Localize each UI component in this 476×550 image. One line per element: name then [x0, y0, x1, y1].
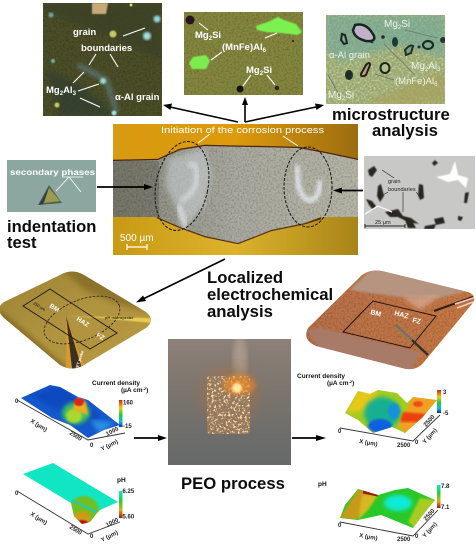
colour bar	[437, 485, 440, 508]
label: BM: BM	[370, 309, 382, 319]
chart: pH before PEO: 0	[90, 534, 94, 540]
heading: indentation test: indentation	[7, 217, 96, 236]
label: Mg2Si top: Mg	[384, 19, 398, 30]
chart: current density before PEO: 160	[123, 400, 134, 406]
glowing coupon	[207, 376, 250, 434]
title: pH	[318, 481, 327, 488]
scale bar: 500 um: 500 µm	[120, 233, 154, 244]
label: Mg2Al3: Al	[63, 85, 73, 96]
heading: microstructure analysis: analysis	[372, 121, 438, 140]
label: grain boundaries: boundaries	[388, 187, 416, 193]
label: Mg2Al3: 2	[60, 91, 64, 97]
label: Mg2Si upper: Si	[212, 30, 221, 41]
diamond photo: copper specimen after PEO	[306, 270, 474, 370]
colour bar	[437, 390, 441, 413]
chart: current density before PEO: )	[146, 387, 148, 394]
surface	[340, 385, 440, 437]
title: Current density	[92, 380, 140, 387]
chart: current density after PEO: 0	[338, 429, 342, 435]
label: grain boundaries: grain	[388, 179, 400, 185]
chart: pH after PEO: 2500	[397, 537, 411, 543]
label: MnFe Al6: (MnFe)Al	[222, 42, 263, 53]
chart: current density after PEO: )	[352, 380, 354, 387]
label: Mg2Al3: Mg	[46, 85, 60, 96]
leader lines	[199, 23, 277, 86]
chart: current density before PEO: 2500	[68, 431, 83, 443]
chart: current density after PEO: -2	[349, 379, 353, 384]
label: boundaries: boundaries	[81, 43, 132, 54]
title: Current density	[297, 373, 345, 380]
map frame	[23, 289, 117, 349]
heading: localized electrochemical analysis: electrochemical	[207, 285, 333, 304]
phase: green inclusion small	[189, 55, 210, 69]
arrow: to grain boundaries photo	[163, 104, 238, 122]
label: Mg2Si lower: 2	[260, 71, 264, 77]
diamond photo: gold specimen with SVET probe	[0, 272, 151, 368]
chart: current density before PEO: 1000	[105, 426, 120, 438]
label: Mg2Al3: Al	[428, 61, 437, 72]
heading: microstructure analysis: microstructure	[332, 105, 450, 124]
icon: pyramid indent	[38, 185, 62, 205]
chart: pH before PEO	[15, 460, 135, 544]
label: FZ: FZ	[412, 317, 422, 326]
label: Mg2Si lower: Mg	[246, 65, 260, 76]
chart: current density after PEO: (µA cm	[327, 380, 349, 387]
chart: pH before PEO: 0	[15, 491, 19, 497]
label: BM: BM	[48, 303, 60, 314]
label: Mg2Si bottom: Si	[345, 90, 354, 101]
chart: current density before PEO: -2	[143, 386, 147, 391]
arrow: to localized analysis	[136, 259, 225, 302]
label: pH microprobe: pH microprobe	[105, 315, 134, 320]
surface	[20, 460, 120, 526]
ellipse: right weld zone	[284, 147, 332, 227]
label: HAZ: HAZ	[75, 316, 90, 329]
label: Mg2Si bottom: 2	[342, 96, 346, 102]
chart: current density before PEO: Y (µm)	[100, 439, 119, 453]
phase: green inclusion large	[256, 17, 302, 35]
chart: current density after PEO: 3	[443, 390, 447, 396]
photo: Mg2Si and MnFe phases micrograph	[184, 12, 303, 95]
label: Mg2Al3: Mg	[411, 61, 425, 72]
label: MnFe Al6: 6	[434, 82, 438, 88]
arrow: to PEO photo	[134, 435, 167, 441]
chart: current density before PEO: 0	[90, 443, 94, 449]
label: Mg2Al3: 3	[437, 67, 441, 73]
label: MnFe Al6: (MnFe)Al	[395, 76, 434, 87]
chart: current density after PEO: 0	[415, 440, 419, 446]
label: Mg2Si upper: Mg	[195, 30, 209, 41]
arrow: to indentation	[97, 184, 153, 190]
label: Mg2Al3: 2	[425, 67, 429, 73]
chart: pH after PEO: 2500	[423, 508, 437, 522]
label: Mg2Si lower: Si	[263, 65, 272, 76]
heading: localized electrochemical analysis: analysis	[207, 302, 273, 321]
chart: current density after PEO: Y (µm)	[422, 428, 439, 445]
label: FZ: FZ	[95, 332, 105, 342]
heading: PEO process: PEO process	[181, 474, 285, 493]
chart: current density after PEO: -5	[443, 411, 449, 417]
chart: pH after PEO	[318, 481, 450, 543]
arrow: from PEO photo	[292, 435, 326, 441]
arrow: to phases photo	[242, 97, 248, 122]
scale bar: 500 um	[120, 233, 154, 250]
label: grain: grain	[73, 27, 96, 38]
colour bar	[119, 491, 122, 518]
chart: pH after PEO: 0	[338, 523, 342, 529]
chart: pH before PEO: 6.25	[122, 489, 135, 495]
chart: current density before PEO	[15, 380, 148, 453]
heading: microstructure analysis	[332, 105, 450, 140]
chart: pH before PEO: Y (µm)	[100, 530, 119, 544]
label: Mg2Si upper: 2	[209, 36, 213, 42]
chart: pH before PEO: 1000	[105, 517, 120, 529]
label: Mg2Si top: 2	[398, 25, 402, 31]
chart: pH after PEO: 7.8	[441, 484, 450, 490]
chart: current density after PEO: X (µm)	[359, 439, 378, 448]
chart: pH before PEO: 5.60	[122, 514, 135, 520]
chart: pH after PEO: 7.1	[441, 505, 450, 511]
photo: indentation test	[7, 160, 96, 212]
chart: current density before PEO: X (µm)	[29, 419, 48, 433]
label: HAZ: HAZ	[394, 310, 410, 321]
chart: pH before PEO: 2500	[68, 525, 83, 537]
chart: current density after PEO: 2500	[423, 414, 437, 428]
heading: localized electrochemical analysis	[207, 268, 333, 321]
map frame	[343, 301, 436, 348]
label: initiation of corrosion: Initiation of the corrosion process	[161, 125, 324, 136]
leader lines	[73, 28, 145, 107]
surface	[338, 486, 438, 530]
heading: indentation test	[7, 217, 96, 252]
label: SIET probe: SVET probe	[73, 349, 85, 373]
label: alpha-Al grain: α-Al grain	[329, 50, 370, 61]
surface	[15, 380, 125, 442]
scale bar: 25 um: 25 µm	[375, 220, 391, 226]
heading: indentation test: test	[7, 233, 37, 252]
chart: current density after PEO	[297, 373, 449, 449]
ellipse: left weld zone	[154, 141, 210, 231]
photo: microstructure micrograph	[326, 15, 446, 104]
label: secondary phases: secondary phases	[10, 167, 95, 177]
photo: grain boundaries micrograph	[43, 3, 162, 116]
chart: pH after PEO: 0	[415, 534, 419, 540]
title: pH	[117, 477, 126, 484]
chart: current density before PEO: (µA cm	[121, 387, 143, 394]
heading: localized electrochemical analysis: Localized	[207, 268, 283, 287]
label: Mg2Al3: 3	[73, 91, 77, 97]
label: alpha-Al grain: α-Al grain	[115, 92, 160, 103]
label: Mg2Si top: Si	[401, 19, 410, 30]
photo: weld cross-section	[113, 124, 358, 255]
chart: current density before PEO: 0	[15, 399, 19, 405]
chart: pH after PEO: X (µm)	[359, 533, 378, 542]
chart: current density before PEO: -15	[123, 424, 132, 430]
arrow: to SEM	[333, 188, 363, 194]
arrow: to microstructure photo	[245, 104, 324, 122]
label: grain boundaries	[388, 179, 416, 191]
chart: current density after PEO: 2500	[397, 443, 411, 449]
label: scale: 250 µm	[32, 301, 47, 312]
chart: pH before PEO: X (µm)	[29, 512, 48, 526]
label: Mg2Si bottom: Mg	[328, 90, 342, 101]
colour bar	[119, 400, 122, 427]
photo: PEO process	[168, 336, 291, 465]
probes	[434, 297, 473, 311]
label: MnFe Al6: 6	[263, 48, 267, 54]
photo: SEM grain boundaries	[364, 156, 475, 229]
chart: pH after PEO: Y (µm)	[422, 522, 439, 539]
